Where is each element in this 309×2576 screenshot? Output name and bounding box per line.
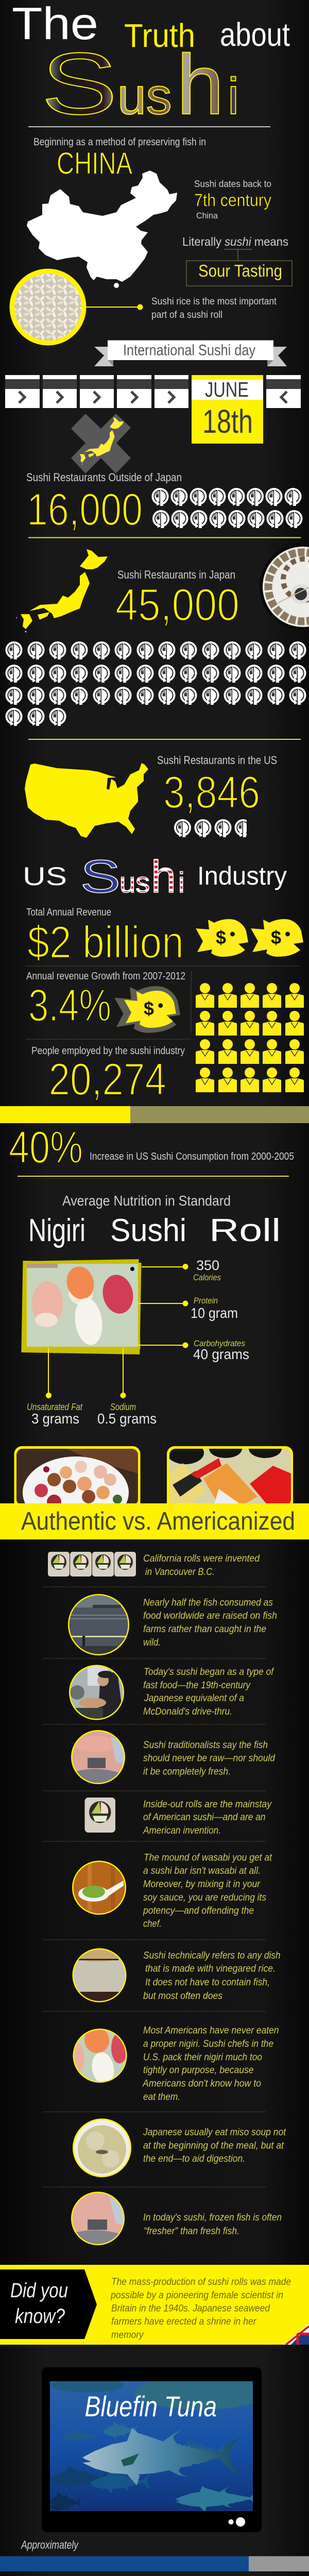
stat: 40 percent [9, 1122, 294, 1173]
heading: nutrition: Average Nutrition in Standard [62, 1193, 231, 1209]
item: california rolls [48, 1552, 260, 1578]
photo: frozen salmon [71, 2192, 125, 2245]
item: wasabi: potency—and offending the [143, 1905, 254, 1917]
fact: sour tasting: Literally sushi means [182, 235, 288, 248]
item: fish farms: food worldwide are raised on fish [143, 1610, 277, 1621]
item: nigiri: Most Americans have never eaten [143, 2025, 279, 2036]
icon: growing fish [114, 986, 180, 1033]
item: fish farms: farms rather than caught in the [143, 1623, 266, 1635]
item: vinegared rice: that is made with vinegared rice. [145, 1963, 276, 1974]
heading: US Sushi Industry: Industry [197, 861, 287, 890]
item: wasabi: soy sauce, you are reducing its [143, 1892, 266, 1903]
date: June 18th: JUNE [205, 378, 249, 401]
ribbon: International Sushi day [94, 340, 287, 366]
stat: revenue: $2 billion [27, 917, 184, 968]
stat: revenue [26, 907, 303, 968]
item: nigiri [70, 2025, 279, 2103]
photo: authentic sushi [14, 1446, 140, 1503]
nutrition labels: Unsaturated Fat [27, 1402, 83, 1412]
panel: did you know [0, 2265, 309, 2345]
photo: nigiri close-up [73, 2029, 127, 2082]
photo: wasabi [72, 1860, 127, 1917]
item: fast food: fast food—the 19th-century [143, 1680, 251, 1691]
heading: US Sushi Industry: us [119, 866, 150, 899]
bar: 80 percent [0, 2556, 309, 2571]
heading: nutrition: Nigiri [28, 1213, 85, 1248]
photo: chef [67, 1664, 126, 1721]
stat: in US: 3,846 [163, 767, 260, 818]
title: us [117, 67, 172, 125]
item: traditionalists: Sushi traditionalists say the fish [143, 1739, 268, 1751]
connector lines [46, 1264, 188, 1398]
stat: revenue: Total Annual Revenue [26, 907, 111, 918]
item: miso: at the beginning of the meal, but at [143, 2140, 284, 2151]
item: vinegared rice: but most often does [143, 1990, 222, 2002]
map: China [27, 171, 177, 288]
item: inside-out rolls: of American sushi—and are an [143, 1811, 266, 1823]
icon: rolls [48, 1552, 136, 1577]
item: fast food: McDonald's drive-thru. [143, 1706, 232, 1717]
item: wasabi: The mound of wasabi you get at [144, 1852, 272, 1863]
pictogram: 16 plates [151, 488, 303, 528]
stat: employees: 20,274 [48, 1054, 166, 1105]
photo: americanized sushi [167, 1446, 293, 1503]
item: traditionalists [70, 1728, 276, 1788]
text: did you know: possible by a pioneering female scientist in [110, 2290, 283, 2301]
heading: nutrition: Roll [209, 1213, 281, 1248]
heading: US Sushi Industry: S [80, 851, 121, 903]
item: inside-out rolls: American invention. [143, 1825, 221, 1836]
rice photo [9, 269, 143, 345]
item: traditionalists: it be completely fresh. [143, 1766, 231, 1777]
stat: outside Japan: 16,000 [27, 484, 143, 535]
icon: dollar fish [251, 919, 303, 957]
fact: rice: Sushi rice is the most important [151, 296, 277, 307]
fact: rice [151, 296, 277, 320]
map: Japan [16, 549, 108, 633]
date: June 18th [192, 375, 263, 444]
tablet: bluefin tuna photo: Bluefin Tuna [84, 2390, 217, 2422]
date: June 18th: 18th [202, 403, 253, 440]
item: nigiri: U.S. pack their nigiri much too [143, 2052, 262, 2063]
item: fish farms: wild. [143, 1637, 161, 1648]
nutrition labels: Calories [193, 1273, 221, 1282]
icon: dollar fish: $ [216, 927, 226, 948]
item: vinegared rice: It does not have to contain fish, [145, 1976, 270, 1988]
item: nigiri: eat them. [143, 2091, 180, 2103]
item: traditionalists: should never be raw—nor should [143, 1753, 276, 1764]
stat: in Japan: 45,000 [115, 579, 239, 630]
heading: US Sushi Industry [23, 851, 287, 903]
nutrition labels: Sodium [110, 1402, 136, 1412]
nutrition labels: 3 grams [31, 1411, 79, 1427]
stat: in Japan: Sushi Restaurants in Japan [117, 568, 235, 581]
icon: X over Japan [71, 414, 131, 473]
nutrition labels [27, 1258, 249, 1427]
item: fish farms: Nearly half the fish consumed as [143, 1597, 273, 1608]
heading: nutrition: Sushi [110, 1213, 186, 1248]
fact: 7th century: Sushi dates back to [194, 179, 271, 189]
item: fast food: Today's sushi began as a type of [144, 1666, 274, 1677]
nutrition labels: Carbohydrates [194, 1338, 245, 1348]
title: about [220, 16, 290, 53]
pictogram: US plates [174, 819, 252, 837]
photo: frozen salmon [71, 1730, 125, 1784]
fact: 7th century: China [196, 211, 218, 221]
item: fast food [67, 1664, 274, 1721]
item: nigiri: tightly on purpose, because [143, 2064, 254, 2076]
fact: 7th century [194, 179, 271, 221]
title: Truth [124, 17, 195, 54]
fact: sour tasting [182, 235, 292, 286]
arrow tag: Did you [10, 2279, 68, 2302]
text: did you know: memory [111, 2329, 144, 2341]
fact: sour tasting: Sour Tasting [198, 261, 282, 280]
item: nigiri: Americans don't know how to [142, 2078, 261, 2089]
pictogram: people [196, 983, 304, 1092]
item: vinegared rice: Sushi technically refers to any dish [143, 1950, 281, 1961]
arrow tag [0, 2269, 97, 2339]
item: wasabi: Moreover, by mixing it in your [143, 1878, 261, 1890]
icon: dollar fish [196, 919, 248, 957]
item: miso: the end—to aid digestion. [143, 2153, 245, 2164]
item: vinegared rice [72, 1948, 280, 2002]
icon: growing fish: $ [144, 998, 154, 1019]
item: wasabi: chef. [143, 1918, 162, 1929]
text: did you know [110, 2276, 291, 2341]
nutrition labels: 40 grams [193, 1346, 249, 1362]
stat: growth [26, 971, 185, 1033]
stat: employees: People employed by the sushi industry [31, 1045, 185, 1057]
text: did you know: Britain in the 1940s. Japanese seaweed [111, 2303, 270, 2314]
item: wasabi: a sushi bar isn't wasabi at all. [143, 1865, 261, 1876]
nutrition labels: 10 gram [191, 1305, 238, 1321]
item: inside-out rolls [84, 1798, 272, 1836]
item: miso [72, 2117, 286, 2178]
item: california rolls: in Vancouver B.C. [145, 1566, 215, 1578]
nutrition labels: Protein [194, 1296, 218, 1306]
heading: US Sushi Industry: h [151, 851, 176, 902]
stat: 40 percent: 40% [9, 1122, 83, 1173]
fact: 7th century: 7th century [194, 191, 271, 210]
heading: US Sushi Industry: US [23, 862, 67, 891]
text: approximately: Approximately [20, 2538, 79, 2551]
item: frozen fish [71, 2192, 281, 2245]
pictogram: 45 plates [5, 641, 306, 726]
bar: 40 percent [0, 1106, 309, 1123]
item: california rolls: California rolls were invented [143, 1553, 260, 1564]
intro text: Beginning as a method of preserving fish in [33, 137, 206, 148]
title: h [177, 37, 224, 132]
heading: nutrition [28, 1193, 281, 1248]
nutrition labels: 0.5 grams [97, 1411, 157, 1427]
photo: rice dish [72, 1948, 127, 2002]
item: wasabi [72, 1852, 272, 1929]
stat: growth: Annual revenue Growth from 2007-2012 [26, 971, 185, 982]
item: inside-out rolls: Inside-out rolls are the mainstay [143, 1799, 272, 1810]
photo: miso soup [72, 2117, 132, 2178]
heading: China: CHINA [57, 146, 132, 180]
icon: roll [84, 1798, 115, 1833]
photo: sushi plate [260, 544, 309, 630]
ribbon: International Sushi day: International Sushi day [123, 342, 255, 359]
icon: UK flag corner [283, 2324, 309, 2345]
arrow tag: know? [15, 2305, 65, 2328]
text: did you know: The mass-production of sushi rolls was made [111, 2276, 291, 2287]
map: USA [25, 763, 148, 838]
photo: nigiri [13, 1259, 141, 1354]
tablet: bluefin tuna photo [42, 2367, 268, 2532]
stat: outside Japan: Sushi Restaurants Outside of Japan [26, 471, 182, 484]
icon: dollar fish: $ [271, 927, 281, 948]
item: fish farms [67, 1592, 277, 1656]
title: S [41, 35, 117, 133]
calendar [5, 375, 301, 444]
item: frozen fish: In today's sushi, frozen fish is often [143, 2212, 282, 2223]
heading: US Sushi Industry: i [178, 866, 184, 899]
text: did you know: farmers have erected a shrine in her [111, 2316, 257, 2327]
item: frozen fish: “fresher” than fresh fish. [144, 2226, 239, 2237]
item: nigiri: a proper nigiri. Sushi chefs in the [143, 2038, 273, 2049]
title [12, 0, 290, 133]
nutrition labels: 350 [196, 1258, 219, 1273]
photo: fish farm [67, 1592, 131, 1656]
fact: rice: part of a sushi roll [151, 310, 222, 320]
item: miso: Japanese usually eat miso soup not [143, 2127, 286, 2138]
title: i [228, 67, 239, 125]
item: fast food: Japanese equivalent of a [144, 1692, 244, 1704]
stat: in US: Sushi Restaurants in the US [157, 754, 277, 767]
stat: growth: 3.4% [28, 980, 111, 1030]
